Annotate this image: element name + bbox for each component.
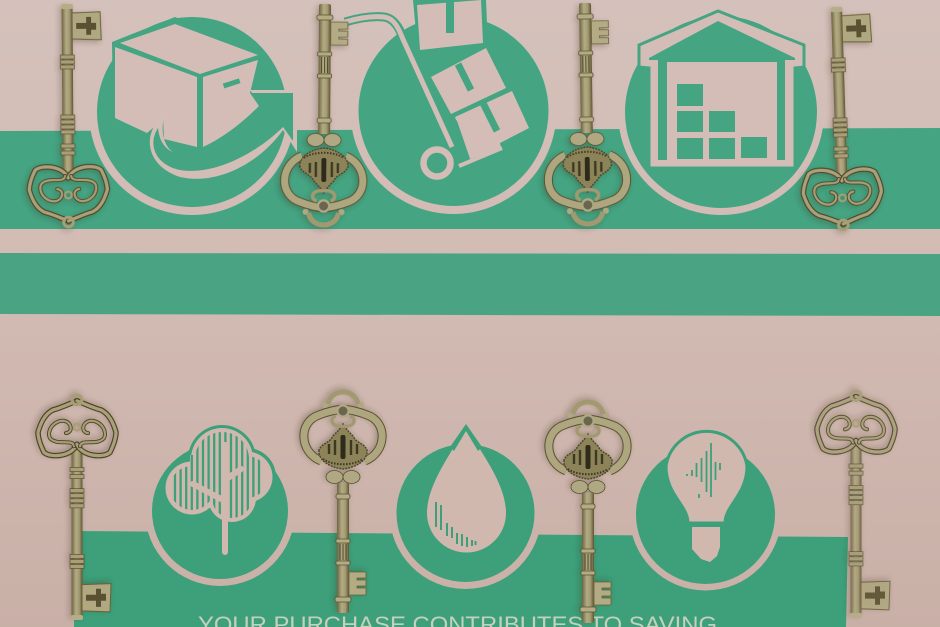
key: top row 4 (798, 6, 882, 231)
icon: package with arrow (89, 9, 297, 215)
key: bottom row 3 (549, 402, 627, 623)
icon: water drop (390, 424, 542, 589)
green band: middle (0, 253, 940, 316)
icon: warehouse (618, 9, 824, 215)
key: bottom row 4 (silver) (817, 391, 895, 618)
key: top row 2 (284, 4, 364, 225)
key: top row 1 (28, 4, 108, 227)
green band: top (0, 128, 940, 229)
key: top row 3 (546, 2, 627, 225)
key: bottom row 2 (304, 392, 382, 613)
key: bottom row 1 (38, 395, 116, 620)
icon: light bulb (630, 431, 782, 590)
icon: tree (145, 425, 295, 586)
icon: hand truck with boxes (345, 0, 556, 214)
green band: bottom panel (74, 531, 848, 627)
